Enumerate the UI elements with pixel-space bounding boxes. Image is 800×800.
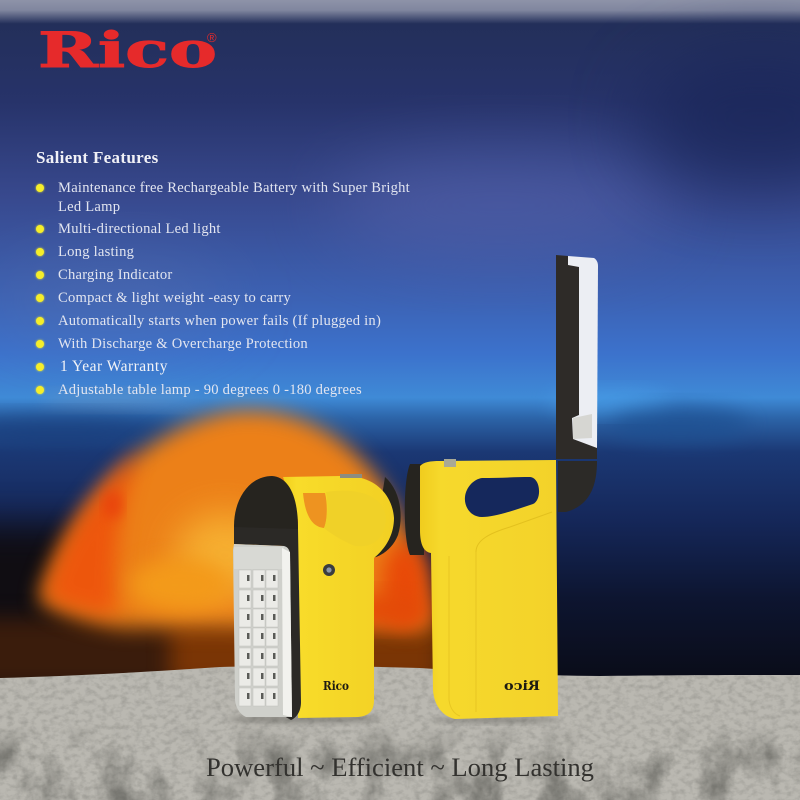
lens [233, 544, 292, 717]
lantern: left, closed, front view [233, 474, 401, 720]
mirrored brand: Rico [504, 679, 540, 694]
black cap [234, 476, 298, 530]
top switch [340, 474, 362, 478]
tent [0, 411, 500, 688]
yellow body [420, 460, 558, 719]
side switch [323, 564, 335, 576]
handle opening [465, 477, 539, 517]
raised lamp clear cover [568, 256, 598, 450]
raised lamp led strip [573, 414, 592, 439]
logo: Rico [38, 22, 217, 79]
body contour [476, 512, 552, 552]
feature 9: Adjustable table lamp - 90 degrees 0 -180 degrees [58, 382, 362, 398]
flashlight head rim [372, 477, 401, 558]
rocky ground [0, 660, 800, 800]
sky glow [0, 50, 800, 448]
lamp hinge [558, 461, 597, 512]
yellow body [283, 476, 394, 718]
lantern: right, opened, back view [405, 255, 598, 719]
logo [38, 22, 217, 79]
tagline: Powerful ~ Efficient ~ Long Lasting [206, 752, 594, 782]
left dark hillside [0, 525, 115, 695]
head rim [405, 464, 424, 555]
feature 7: With Discharge & Overcharge Protection [58, 336, 308, 352]
led grid [239, 570, 278, 706]
lamp brand: Rico [323, 679, 349, 693]
panel: salient features [34, 148, 410, 398]
feature 5: Compact & light weight -easy to carry [58, 290, 291, 306]
handle opening [303, 493, 327, 528]
raised lamp back [556, 255, 597, 459]
logo: ® [207, 30, 217, 45]
feature 1: Maintenance free Rechargeable Battery with Super Bright [58, 180, 410, 196]
feature 2: Multi-directional Led light [58, 221, 221, 237]
top switch [444, 459, 456, 467]
heading: Salient Features [36, 148, 159, 167]
feature 1 [34, 180, 410, 215]
feature 6: Automatically starts when power fails (If plugged in) [58, 313, 381, 329]
feature 3: Long lasting [58, 244, 134, 260]
feature 4: Charging Indicator [58, 267, 173, 283]
feature 8: 1 Year Warranty [60, 358, 168, 375]
lamp shadows [227, 715, 383, 723]
black spine [234, 527, 301, 720]
feature 1: Led Lamp [58, 199, 120, 215]
